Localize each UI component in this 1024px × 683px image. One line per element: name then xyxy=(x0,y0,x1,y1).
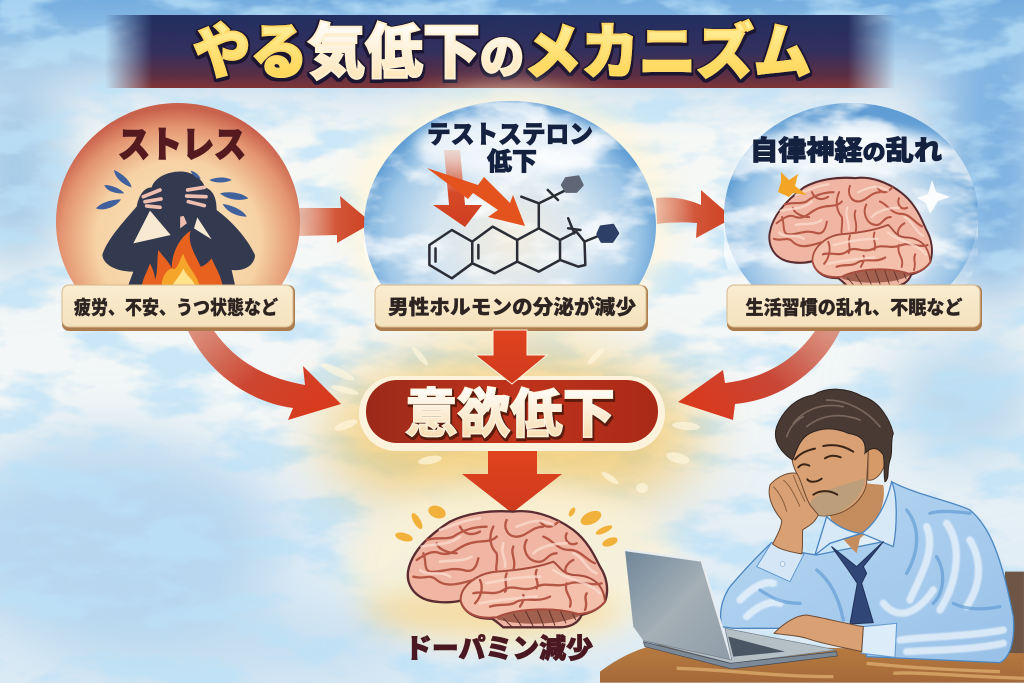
icon: gold spark xyxy=(778,172,807,197)
neck xyxy=(830,483,884,553)
halo behind heading xyxy=(415,113,605,177)
chair back xyxy=(1005,572,1024,660)
label text: male hormone decrease: 男性ホルモンの分泌が減少 xyxy=(388,295,636,319)
icon: zigzag decline arrow xyxy=(427,168,525,226)
hair xyxy=(775,389,893,482)
icon: white sparkle xyxy=(917,180,950,214)
label: stress effects xyxy=(62,285,295,331)
label text: lifestyle and insomnia: 生活習慣の乱れ、不眠など xyxy=(746,296,962,319)
resting hand xyxy=(774,615,863,652)
callout: motivation decline xyxy=(359,376,665,451)
label text: fatigue, anxiety, depression: 疲労、不安、うつ状態など xyxy=(74,296,278,319)
heading: stress: ストレス xyxy=(118,124,246,165)
arrow: autonomic disorder down to motivation decline xyxy=(678,331,840,420)
panel: dopamine decrease xyxy=(394,503,619,664)
supporting hand and forearm xyxy=(769,473,818,554)
panel: autonomic nervous disorder xyxy=(724,103,982,331)
heading: testosterone decline: テストステロン xyxy=(427,121,593,149)
icon: centre brain xyxy=(408,511,607,627)
collar xyxy=(815,482,896,555)
panel: stress xyxy=(56,103,300,341)
arrow: testosterone to autonomic disorder xyxy=(656,190,733,238)
heading: testosterone decline: 低下 xyxy=(487,148,537,176)
eyes, brows, nose and mouth xyxy=(795,445,853,495)
icon: grey atom xyxy=(562,177,582,192)
icon: brain right xyxy=(769,178,932,286)
arrow: stress down to motivation decline xyxy=(188,331,341,420)
halo behind heading xyxy=(741,128,951,172)
panel: testosterone decline xyxy=(364,100,656,351)
callout text: 意欲低下 xyxy=(405,385,615,444)
ear xyxy=(868,448,885,480)
heading: dopamine decrease: ドーパミン減少 xyxy=(405,634,593,664)
title banner xyxy=(105,15,895,88)
label: male hormone secretion xyxy=(375,285,648,331)
decorative rays around centre xyxy=(320,345,700,493)
icon: yellow sparks around brain xyxy=(394,503,619,548)
title text: やる気低下のメカニズム xyxy=(193,19,811,86)
icon: flame xyxy=(142,231,223,287)
illustration: tired man at laptop xyxy=(600,389,1024,683)
table xyxy=(600,643,1024,683)
laptop xyxy=(625,550,837,669)
arrow: motivation decline to dopamine xyxy=(462,451,562,513)
label: lifestyle disruption xyxy=(727,285,982,331)
tie xyxy=(832,542,883,624)
heading: autonomic disorder: 自律神経の乱れ xyxy=(750,136,942,166)
icon: navy atom xyxy=(598,225,618,242)
stubble xyxy=(810,478,865,516)
heading: testosterone decline xyxy=(427,121,593,176)
arrow: testosterone down to motivation decline xyxy=(475,330,547,384)
arrow: stress to low testosterone xyxy=(299,196,372,243)
icon: sweat drops xyxy=(96,170,248,217)
face xyxy=(791,425,868,516)
icon: stressed person silhouette xyxy=(96,170,255,287)
chart: testosterone molecule xyxy=(429,177,618,278)
shirt xyxy=(721,482,1014,663)
warm glows behind circles and centre xyxy=(322,90,702,650)
icon: straight decline arrow xyxy=(433,150,482,227)
